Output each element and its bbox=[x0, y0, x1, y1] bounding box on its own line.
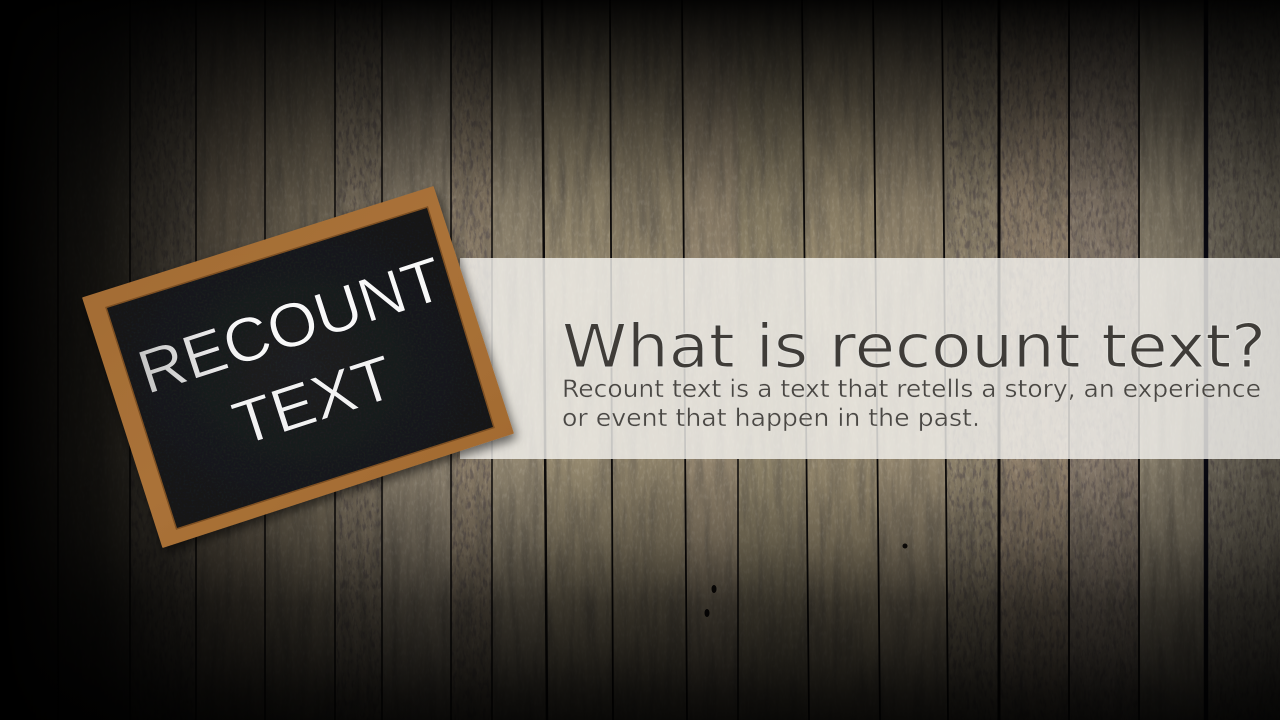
board title: RECOUNT bbox=[130, 245, 452, 408]
knots bbox=[704, 544, 908, 617]
body text: Recount text is a text that retells a story, an experience bbox=[562, 375, 1261, 403]
board surface bbox=[107, 208, 493, 528]
board title: TEXT bbox=[225, 343, 402, 459]
wooden frame bbox=[83, 187, 513, 547]
body text: or event that happen in the past. bbox=[562, 404, 980, 432]
heading: What is recount text?: What is recount text? bbox=[562, 312, 1266, 382]
translucent text band bbox=[460, 258, 1280, 459]
body text bbox=[562, 375, 1261, 432]
chalkboard bbox=[83, 187, 513, 547]
